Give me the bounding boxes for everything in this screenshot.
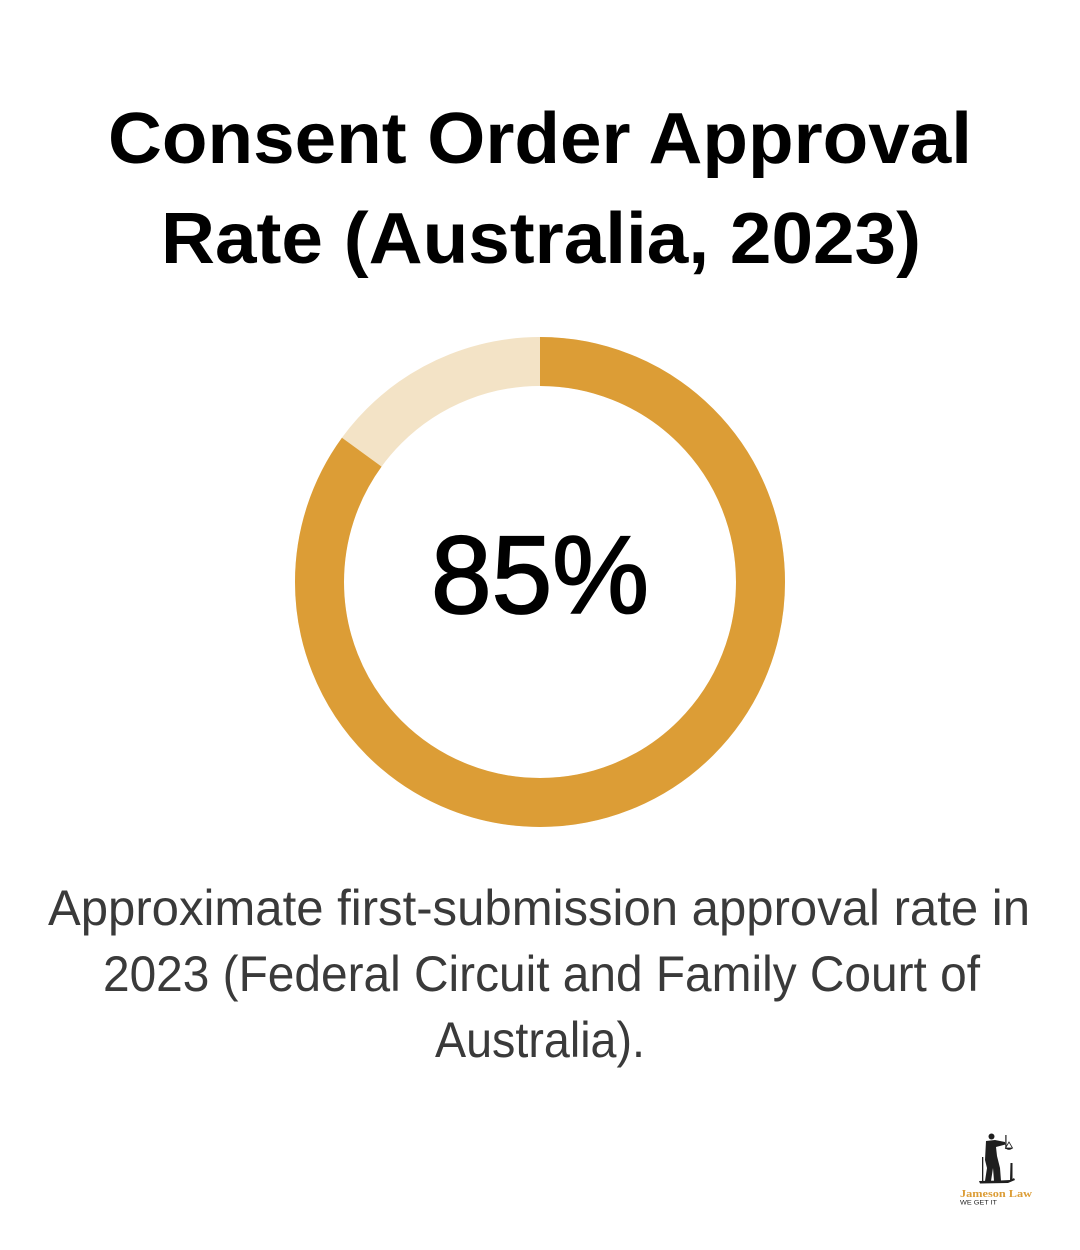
description text [48,880,1030,1068]
value: 85%: 85% [431,514,649,637]
logo: Jameson Law [960,1134,1032,1206]
donut chart: 85% [320,362,760,802]
logo tagline: WE GET IT [960,1200,997,1206]
description text: Australia). [435,1012,645,1068]
title: Consent Order Approval [108,99,972,179]
description text: 2023 (Federal Circuit and Family Court of [103,946,980,1002]
icon: scales [1006,1142,1012,1150]
icon: lady justice statue [979,1134,1015,1184]
description text: Approximate first-submission approval rate in [48,880,1030,936]
title: Rate (Australia, 2023) [161,199,921,279]
title [108,99,972,279]
logo wordmark: Jameson Law [960,1188,1032,1200]
